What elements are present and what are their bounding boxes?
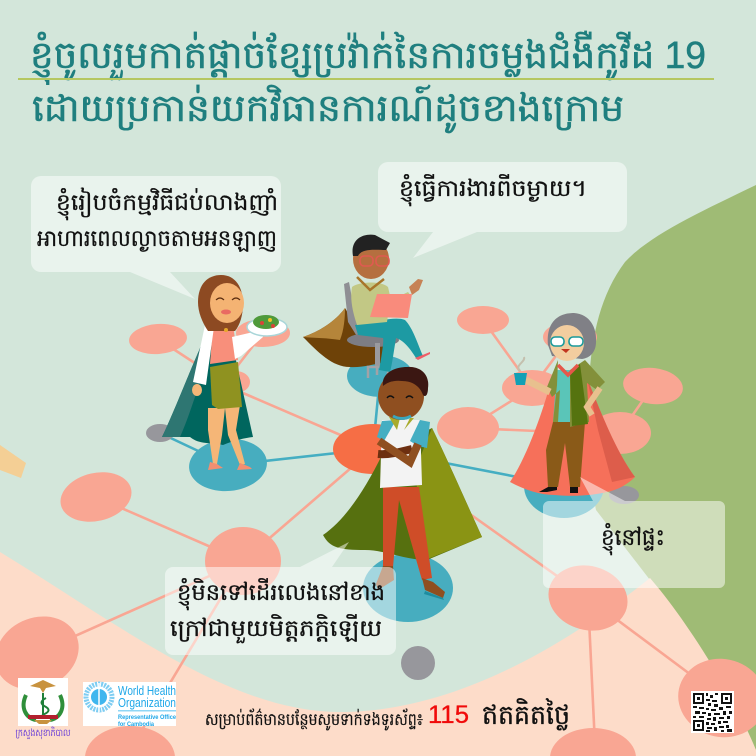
logo: ministry of health	[16, 678, 71, 740]
title: ខ្ញុំចូលរួមកាត់ផ្តាច់ខ្សែប្រវ៉ាក់នៃការចម្លងជំងឺកូវីដ 19	[30, 30, 706, 85]
girl character with salad	[162, 275, 287, 470]
logo: World Health Organization: World Health	[118, 683, 176, 698]
logo: ministry of health: ក្រសួងសុខាភិបាល	[16, 726, 71, 740]
speech bubble: work remotely: ខ្ញុំធ្វើការងារពីចម្ងាយ។	[399, 174, 587, 207]
logo: World Health Organization	[83, 682, 176, 728]
network lines	[37, 320, 722, 750]
speech bubble: stay home: ខ្ញុំនៅផ្ទះ	[601, 523, 665, 556]
grandmother character with cup	[510, 313, 635, 496]
speech bubble: online dinner: អាហារពេលល្ងាចតាមអនឡាញ	[37, 225, 277, 252]
tan corner shape	[0, 445, 26, 478]
logo: World Health Organization: Representative Office	[118, 714, 176, 721]
title	[30, 30, 706, 134]
boy character with green cape	[323, 367, 482, 600]
title: ដោយប្រកាន់យកវិធានការណ៍ដូចខាងក្រោម	[32, 84, 624, 134]
speech bubble: online dinner	[31, 176, 281, 299]
speech bubble: work remotely	[378, 162, 627, 258]
hotline text: ឥតគិតថ្លៃ	[482, 698, 570, 731]
network nodes: grey	[146, 424, 639, 680]
speech bubble: stay home	[543, 477, 725, 588]
speech bubble: no outings with friends	[165, 542, 396, 655]
peach ground curve	[0, 552, 756, 756]
QR code	[691, 691, 734, 733]
network nodes: teal and orange	[187, 355, 604, 622]
hotline text	[205, 698, 570, 731]
man character with laptop	[303, 235, 430, 378]
speech bubble: no outings with friends: ក្រៅជាមួយមិត្តភក្តិឡើយ	[170, 614, 382, 644]
hotline text: 115	[428, 701, 469, 729]
network nodes: salmon	[0, 306, 756, 756]
hotline text: សម្រាប់ព័ត៌មានបន្ថែមសូមទាក់ទងទូរស័ព្ទ៖	[205, 708, 423, 731]
logo: World Health Organization: for Cambodia	[118, 721, 154, 728]
speech bubble: online dinner: ខ្ញុំរៀបចំកម្មវិធីជប់លាងញាំ	[56, 187, 278, 221]
olive green blob	[589, 185, 756, 750]
logo: World Health Organization: Organization	[118, 695, 176, 710]
speech bubble: no outings with friends: ខ្ញុំមិនទៅដើរលេងនៅខាង	[177, 578, 385, 611]
